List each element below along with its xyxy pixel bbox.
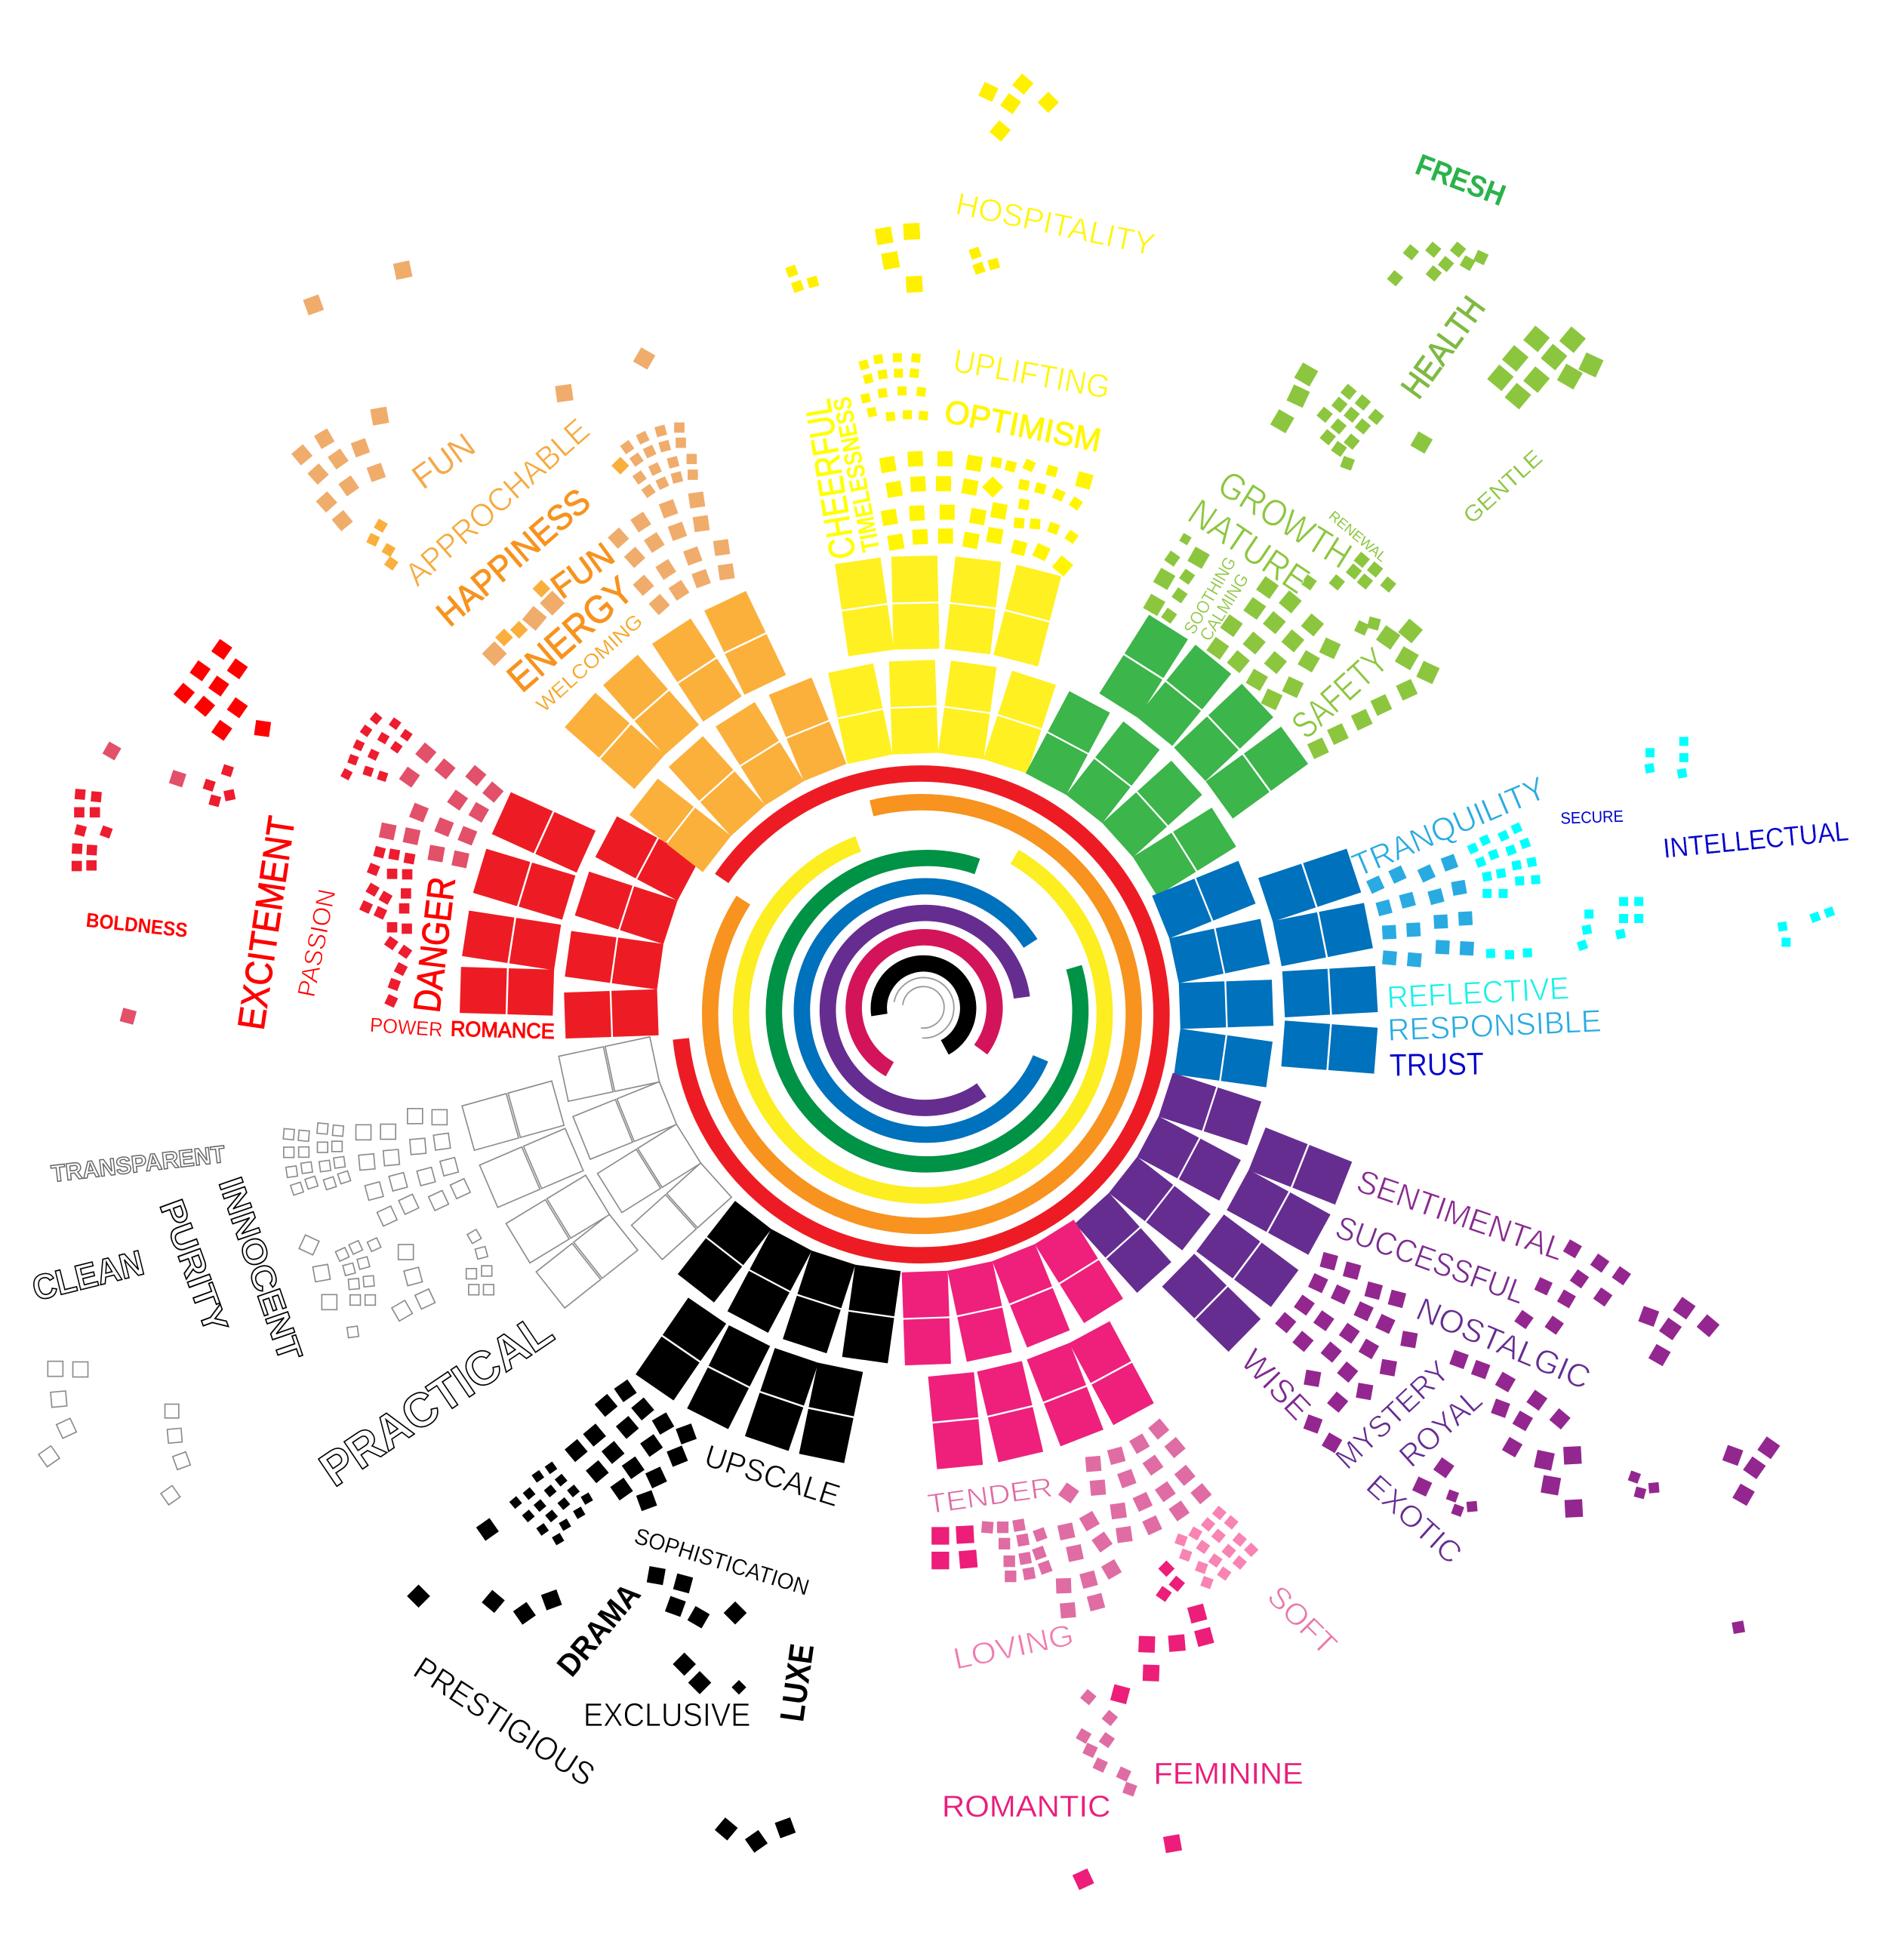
label: clean: CLEAN xyxy=(29,1243,148,1308)
label: drama: DRAMA xyxy=(549,1577,647,1683)
squares: cyan xyxy=(1467,737,1835,959)
label: royal: ROYAL xyxy=(1392,1382,1488,1474)
blocks: black xyxy=(636,1201,900,1463)
label: cheerful: CHEERFUL xyxy=(797,396,864,562)
label: calming: CALMING xyxy=(1196,570,1252,645)
panel: green sector xyxy=(1026,148,1603,896)
label: practical: PRACTICAL xyxy=(311,1303,562,1497)
squares: gold xyxy=(366,457,630,646)
label: trust: TRUST xyxy=(1389,1045,1484,1083)
arc: purple xyxy=(828,913,1022,1108)
blocks: red xyxy=(460,792,699,1038)
label: mystery: MYSTERY xyxy=(1329,1355,1456,1475)
label: soft: SOFT xyxy=(1261,1580,1343,1662)
label: loving: LOVING xyxy=(950,1618,1076,1676)
arc: black xyxy=(879,964,968,1048)
blocks: white outlined xyxy=(462,1037,731,1308)
label: prestigious: PRESTIGIOUS xyxy=(407,1651,601,1794)
label: tender: TENDER xyxy=(925,1472,1054,1520)
label: boldness: BOLDNESS xyxy=(85,909,189,942)
blocks: orange xyxy=(565,591,846,872)
label: upscale: UPSCALE xyxy=(700,1438,845,1513)
squares: black xyxy=(407,1380,796,1853)
label: danger: DANGER xyxy=(405,875,463,1014)
label: luxe: LUXE xyxy=(772,1642,821,1724)
concentric arcs xyxy=(681,774,1162,1255)
panel: red sector xyxy=(72,639,699,1044)
label: wise: WISE xyxy=(1234,1343,1317,1427)
label: romantic: ROMANTIC xyxy=(942,1790,1110,1823)
arc: orange xyxy=(710,802,1134,1226)
arc: gray outer xyxy=(894,977,954,1038)
label: innocent: INNOCENT xyxy=(211,1172,310,1366)
blocks: purple xyxy=(1075,1072,1352,1352)
label: soothing: SOOTHING xyxy=(1180,553,1239,637)
squares: hot pink xyxy=(931,1525,1214,1890)
panel: yellow sector xyxy=(785,73,1158,774)
label: happiness: HAPPINESS xyxy=(429,481,598,634)
panel: orange sector xyxy=(291,260,846,872)
label: approchable: APPROCHABLE xyxy=(399,412,597,593)
label: reflective: REFLECTIVE xyxy=(1386,970,1570,1015)
label: secure: SECURE xyxy=(1560,807,1624,828)
label: power: POWER xyxy=(369,1014,444,1042)
squares: yellow xyxy=(785,73,1059,293)
label: nostalgic: NOSTALGIC xyxy=(1411,1291,1596,1397)
label: sophistication: SOPHISTICATION xyxy=(632,1524,812,1601)
label: romance: ROMANCE xyxy=(451,1017,555,1044)
label: renewal: RENEWAL xyxy=(1326,507,1390,565)
panel: black sector xyxy=(407,1201,900,1853)
label: intellectual: INTELLECTUAL xyxy=(1661,815,1850,864)
label: growth: GROWTH xyxy=(1211,462,1359,577)
label: successful: SUCCESSFUL xyxy=(1331,1209,1530,1312)
label: hospitality: HOSPITALITY xyxy=(953,186,1158,263)
arc: blue xyxy=(802,886,1041,1134)
label: fun lower: FUN xyxy=(543,535,621,606)
squares: white outlined xyxy=(38,1109,494,1505)
label: excitement: EXCITEMENT xyxy=(229,814,303,1032)
label: fun upper: FUN xyxy=(405,426,482,497)
label: tranquility: TRANQUILITY xyxy=(1347,771,1551,884)
label: passion: PASSION xyxy=(293,887,342,999)
label: transparent: TRANSPARENT xyxy=(50,1140,226,1187)
label: optimism: OPTIMISM xyxy=(941,393,1104,460)
blocks: magenta xyxy=(902,1220,1154,1469)
panel: purple sector xyxy=(1075,1072,1780,1634)
label: health: HEALTH xyxy=(1393,289,1492,405)
panel: blue sector xyxy=(1152,737,1850,1088)
label: uplifting: UPLIFTING xyxy=(950,343,1113,406)
squares: bright red xyxy=(174,639,271,741)
label: energy: ENERGY xyxy=(499,568,641,700)
arc: magenta xyxy=(854,937,995,1069)
label: purity: PURITY xyxy=(152,1195,235,1337)
arc: green xyxy=(774,858,1080,1165)
arc: gray inner xyxy=(903,986,944,1028)
label: exotic: EXOTIC xyxy=(1360,1469,1468,1571)
label: safety: SAFETY xyxy=(1284,639,1396,746)
blocks: green xyxy=(1026,615,1308,896)
blocks: blue xyxy=(1152,849,1378,1088)
squares: red xyxy=(72,712,415,1008)
label: gentle: GENTLE xyxy=(1459,445,1547,529)
squares: sky blue xyxy=(1366,854,1474,968)
squares: purple xyxy=(1275,1239,1780,1634)
squares: pale red xyxy=(103,741,503,1025)
label: responsible: RESPONSIBLE xyxy=(1387,1003,1602,1048)
label: welcoming: WELCOMING xyxy=(532,610,647,716)
arc: red xyxy=(681,774,1162,1255)
label: timelessness: TIMELESSNESS xyxy=(828,395,886,554)
squares: rose xyxy=(981,1418,1211,1796)
panel: magenta sector xyxy=(902,1220,1343,1890)
squares: peach xyxy=(291,260,734,666)
label: feminine: FEMININE xyxy=(1153,1758,1304,1791)
squares: light pink xyxy=(1174,1506,1258,1589)
label: exclusive: EXCLUSIVE xyxy=(583,1697,751,1734)
label: fresh: FRESH xyxy=(1411,148,1510,213)
squares: green xyxy=(1143,242,1603,759)
blocks: yellow xyxy=(828,555,1061,774)
panel: white sector xyxy=(29,1037,731,1505)
arc: yellow xyxy=(741,844,1104,1195)
label: nature: NATURE xyxy=(1181,491,1317,602)
label: sentimental: SENTIMENTAL xyxy=(1352,1163,1568,1268)
